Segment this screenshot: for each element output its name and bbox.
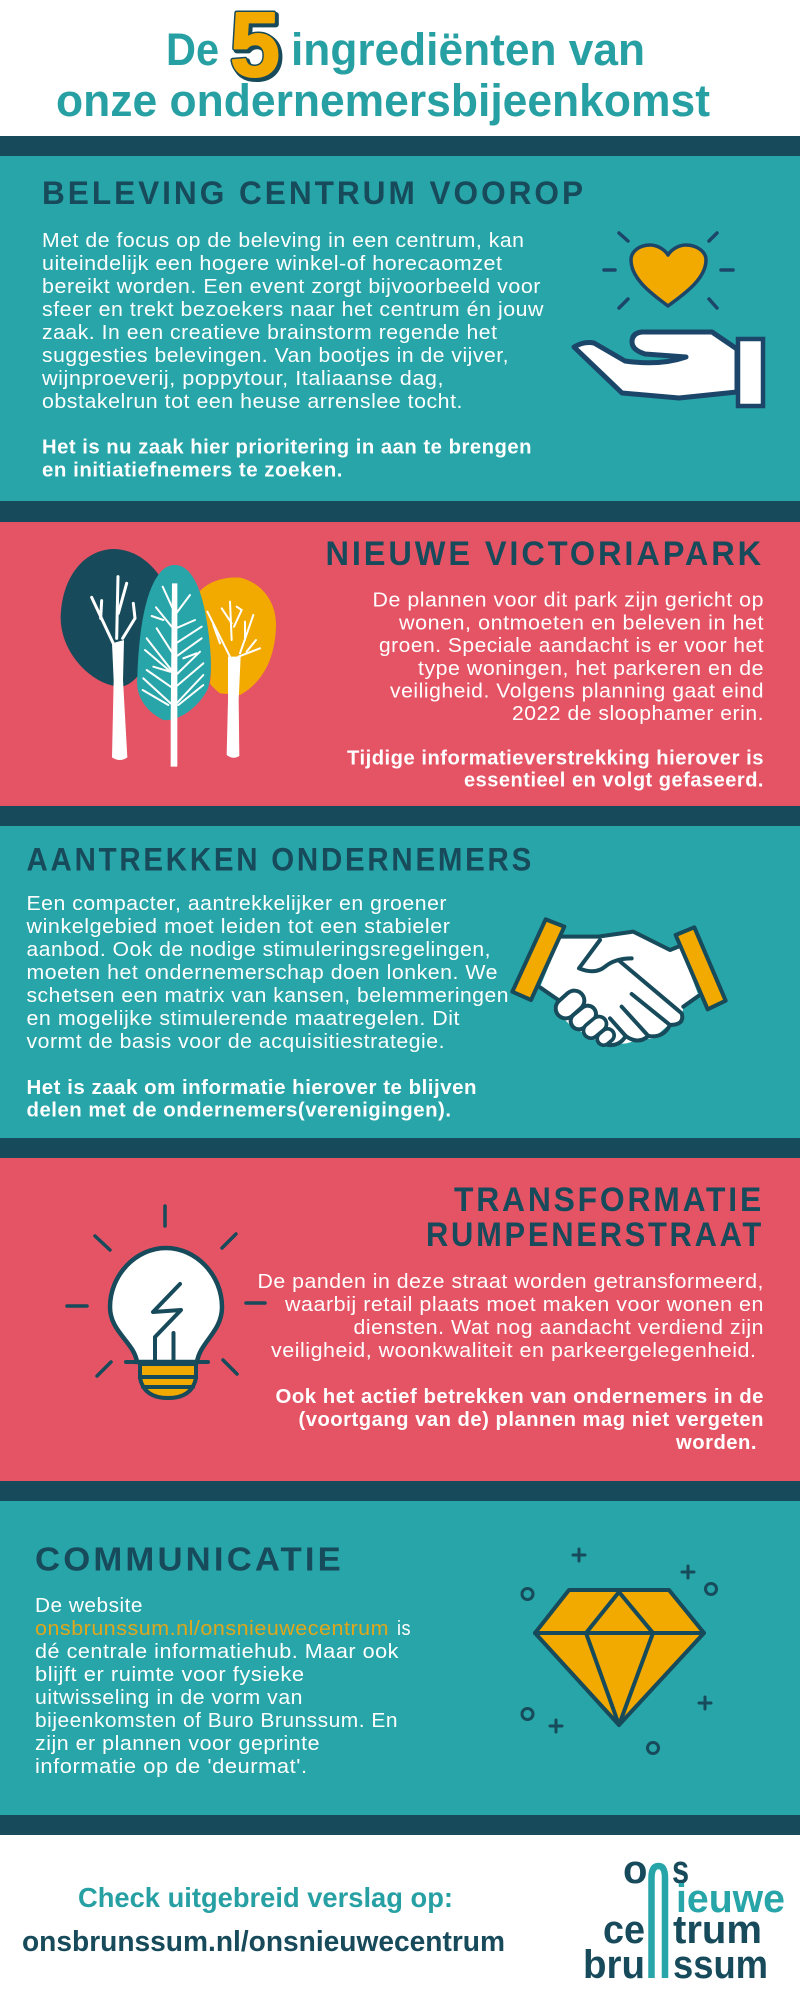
text block: rumpenerstraat conclusion: [276, 1386, 764, 1454]
logo: ons nieuwe centrum brunssum: ce: [603, 1908, 645, 1952]
text block: victoriapark body: groen. Speciale aandacht is er voor het: [379, 635, 764, 657]
text block: ondernemers body: [25, 893, 509, 1053]
text block: ondernemers body: Een compacter, aantrekkelijker en groener: [26, 893, 447, 915]
heading: transformatie rumpenerstraat: [426, 1181, 764, 1254]
icon: handshake: [512, 919, 726, 1045]
footer: call to action: Check uitgebreid verslag op:: [78, 1882, 453, 1913]
icon: three trees: [61, 549, 276, 767]
heading: transformatie rumpenerstraat: RUMPENERSTRAAT: [426, 1216, 764, 1254]
text block: beleving body: bereikt worden. Een event zorgt bijvoorbeeld voor: [42, 276, 541, 298]
text block: communicatie body: dé centrale informatiehub. Maar ook: [35, 1641, 400, 1663]
footer: call to action: onsbrunssum.nl/onsnieuwecentrum: [22, 1926, 505, 1958]
text block: rumpenerstraat body: diensten. Wat nog aandacht verdiend zijn: [354, 1317, 764, 1339]
text block: beleving body: uiteindelijk een hogere winkel-of horecaomzet: [42, 253, 502, 275]
text block: beleving body: [41, 230, 544, 413]
text block: beleving conclusion: Het is nu zaak hier prioritering in aan te brengen: [42, 436, 532, 458]
text block: victoriapark body: type woningen, het parkeren en de: [418, 658, 764, 680]
logo: ons nieuwe centrum brunssum: trum: [673, 1908, 762, 1952]
panel: beleving centrum voorop: [0, 156, 800, 501]
text block: beleving body: obstakelrun tot een heuse arrenslee tocht.: [42, 391, 463, 413]
panel: aantrekken ondernemers: [0, 826, 800, 1138]
text block: rumpenerstraat body: [258, 1271, 764, 1362]
text block: rumpenerstraat body: waarbij retail plaats moet maken voor wonen en: [284, 1294, 764, 1316]
text block: victoriapark body: 2022 de sloophamer erin.: [512, 703, 764, 725]
heading: nieuwe victoriapark: NIEUWE VICTORIAPARK: [326, 535, 764, 573]
text block: ondernemers body: winkelgebied moet leiden tot een stabieler: [25, 916, 451, 938]
panel: nieuwe victoriapark: [0, 522, 800, 806]
text block: ondernemers body: aanbod. Ook de nodige stimuleringsregelingen,: [26, 939, 491, 961]
heading: communicatie: COMMUNICATIE: [35, 1541, 344, 1578]
text block: beleving body: Met de focus op de beleving in een centrum, kan: [42, 230, 524, 252]
text block: communicatie body: bijeenkomsten of Buro Brunssum. En: [35, 1710, 398, 1732]
panel: transformatie rumpenerstraat: [0, 1158, 800, 1481]
logo: ons nieuwe centrum brunssum: ieuwe: [676, 1877, 785, 1921]
text block: communicatie body: is: [397, 1618, 411, 1640]
text block: beleving body: suggesties belevingen. Van bootjes in de vijver,: [42, 345, 509, 367]
text block: rumpenerstraat conclusion: worden.: [675, 1432, 757, 1454]
text block: communicatie body: uitwisseling in de vorm van: [35, 1687, 303, 1709]
text block: victoriapark body: [372, 590, 764, 725]
text block: communicatie body: [35, 1595, 411, 1778]
icon part: heart: [631, 245, 706, 306]
text block: ondernemers conclusion: [26, 1077, 477, 1122]
text block: ondernemers conclusion: delen met de ondernemers(verenigingen).: [26, 1100, 452, 1122]
icon: diamond: [522, 1549, 716, 1754]
text block: ondernemers body: vormt de basis voor de acquisitiestrategie.: [26, 1031, 445, 1053]
text block: victoriapark conclusion: Tijdige informatieverstrekking hierover is: [347, 747, 764, 769]
title: onze ondernemersbijeenkomst: [56, 75, 710, 126]
logo: ons nieuwe centrum brunssum: bru: [583, 1943, 645, 1987]
icon part: screw base: [140, 1364, 196, 1398]
text block: rumpenerstraat body: veiligheid, woonkwaliteit en parkeergelegenheid.: [271, 1340, 756, 1362]
text block: beleving body: zaak. In een creatieve brainstorm regende het: [42, 322, 498, 344]
text block: rumpenerstraat conclusion: Ook het actief betrekken van ondernemers in de: [276, 1386, 764, 1408]
icon part: hand: [574, 332, 737, 398]
text block: communicatie body: blijft er ruimte voor fysieke: [35, 1664, 305, 1686]
icon part: filament: [153, 1284, 181, 1362]
text block: victoriapark conclusion: essentieel en volgt gefaseerd.: [464, 770, 764, 792]
logo: ons nieuwe centrum brunssum: s: [672, 1847, 689, 1892]
icon part: sparkles: [522, 1549, 716, 1754]
icon part: rays: [67, 1206, 265, 1376]
text block: ondernemers conclusion: Het is zaak om informatie hierover te blijven: [26, 1077, 477, 1099]
icon part: cuff: [738, 339, 763, 406]
text block: victoriapark body: De plannen voor dit park zijn gericht op: [372, 590, 764, 612]
title: ingrediënten van: [291, 24, 645, 75]
text block: ondernemers body: schetsen een matrix van kansen, belemmeringen: [26, 985, 509, 1007]
text block: rumpenerstraat body: De panden in deze straat worden getransformeerd,: [258, 1271, 764, 1293]
title: [56, 0, 710, 126]
text block: communicatie body: onsbrunssum.nl/onsnieuwecentrum: [35, 1618, 389, 1640]
heading: beleving centrum voorop: BELEVING CENTRUM VOOROP: [42, 175, 586, 211]
text block: communicatie body: zijn er plannen voor geprinte: [35, 1733, 320, 1755]
icon: heart in hand: [574, 233, 763, 406]
heading: aantrekken ondernemers: AANTREKKEN ONDERNEMERS: [26, 842, 534, 878]
title: De: [166, 24, 219, 75]
text block: ondernemers body: en mogelijke stimulerende maatregelen. Dit: [26, 1008, 460, 1030]
icon part: bulb glass: [110, 1248, 222, 1362]
footer: call to action: [22, 1882, 505, 1958]
text block: beleving conclusion: en initiatiefnemers te zoeken.: [42, 460, 343, 482]
text block: victoriapark body: wonen, ontmoeten en beleven in het: [398, 612, 764, 634]
panel: communicatie: [0, 1501, 800, 1815]
text block: communicatie body: informatie op de 'deurmat'.: [35, 1756, 308, 1778]
text block: victoriapark body: veiligheid. Volgens planning gaat eind: [390, 680, 764, 702]
text block: beleving body: sfeer en trekt bezoekers naar het centrum én jouw: [42, 299, 544, 321]
logo: ons nieuwe centrum brunssum: o: [623, 1848, 647, 1892]
logo: ons nieuwe centrum brunssum: ssum: [673, 1943, 768, 1987]
icon: light bulb: [67, 1206, 265, 1398]
text block: victoriapark conclusion: [347, 747, 764, 792]
text block: beleving conclusion: [42, 436, 532, 482]
icon part: rays: [604, 233, 733, 308]
logo: ons nieuwe centrum brunssum: [583, 1847, 785, 1987]
text block: ondernemers body: moeten het ondernemerschap doen lonken. We: [26, 962, 498, 984]
text block: communicatie body: De website: [35, 1595, 143, 1617]
icon part: gem: [535, 1590, 704, 1725]
text block: rumpenerstraat conclusion: (voortgang van de) plannen mag niet vergeten: [298, 1409, 764, 1431]
heading: transformatie rumpenerstraat: TRANSFORMATIE: [454, 1181, 764, 1219]
text block: beleving body: wijnproeverij, poppytour, Italiaanse dag,: [41, 368, 444, 390]
